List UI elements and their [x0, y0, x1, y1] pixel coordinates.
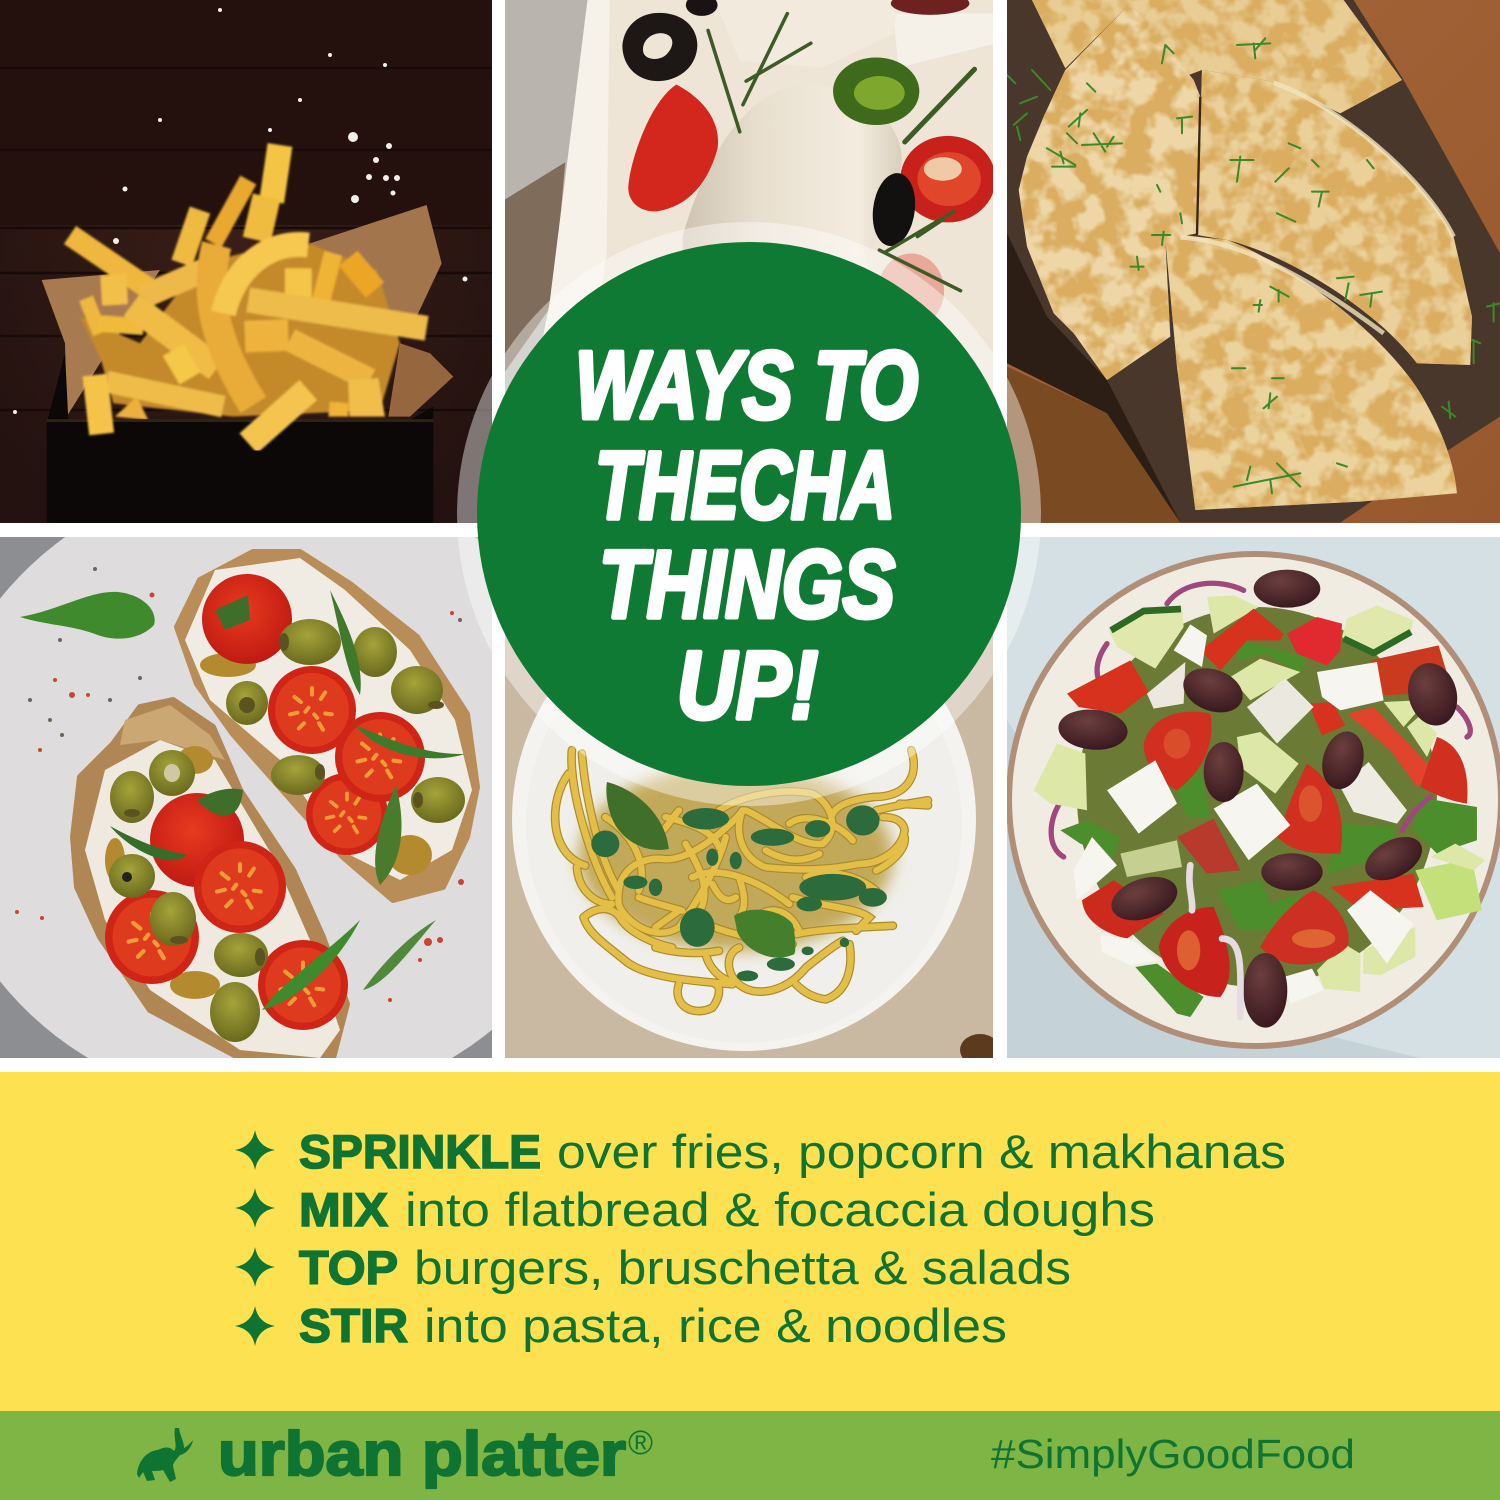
wooden board: [1007, 0, 1500, 523]
dill sprigs: [1007, 38, 1500, 493]
title text: [575, 332, 918, 739]
photo: Greek salad bowl: [1006, 537, 1500, 1058]
cucumber: [1109, 605, 1414, 669]
fries: [70, 145, 427, 420]
bullet: top: burgers, bruschetta & salads: [414, 1241, 1071, 1294]
black box: [47, 353, 433, 527]
black olive ring: [622, 13, 697, 81]
linguine strands: [555, 750, 928, 1011]
bullet: mix: MIX: [299, 1183, 388, 1236]
rosemary: [708, 14, 975, 291]
tomato pieces: [628, 84, 718, 211]
bullet: sprinkle: SPRINKLE: [299, 1125, 541, 1178]
spice specks: [15, 592, 464, 1002]
pasta mound: [579, 764, 893, 951]
mustard: [105, 653, 432, 999]
red pepper: [1067, 609, 1448, 910]
icon: elephant logo: [137, 1428, 193, 1482]
bullet: sprinkle: over fries, popcorn & makhanas: [557, 1125, 1286, 1178]
basil and rocket leaves: [20, 590, 465, 1010]
parchment paper: [42, 205, 453, 417]
onion: [1051, 583, 1470, 857]
olive slice: [872, 173, 916, 246]
translucent ring behind title circle: [457, 222, 1041, 806]
salad base: [1077, 607, 1437, 987]
bullet: sprinkle: [235, 1125, 1286, 1178]
photo: focaccia in white dish: [505, 0, 993, 394]
bullet: stir: [235, 1299, 1007, 1352]
photo: pesto linguine in white bowl: [505, 634, 993, 1058]
flatbread wedges: [1032, 0, 1402, 113]
title badge: [477, 242, 1021, 786]
title text: UP!: [677, 632, 818, 739]
kalamata olives: [1057, 570, 1464, 1028]
registered mark: ®: [628, 1424, 653, 1462]
salt flakes: [13, 8, 468, 414]
lettuce: [1060, 640, 1477, 1017]
photo: flatbread wedges on board: [1007, 0, 1500, 523]
bullet: stir: STIR: [299, 1299, 408, 1352]
dough ball: [682, 105, 902, 250]
pesto: [591, 805, 887, 981]
bullet: top: TOP: [299, 1241, 398, 1294]
feta cubes: [1074, 624, 1414, 1004]
olives: [109, 619, 465, 1042]
footer band: [0, 1411, 1500, 1500]
bread slices: [177, 552, 477, 900]
bullet: stir: into pasta, rice & noodles: [424, 1299, 1007, 1352]
basil leaves: [606, 782, 669, 850]
tomatoes: [1082, 712, 1467, 997]
title text: THECHA: [595, 432, 895, 539]
bullet: mix: into flatbread & focaccia doughs: [405, 1183, 1155, 1236]
title text: WAYS TO: [575, 332, 918, 439]
title text: THINGS: [599, 531, 895, 638]
tomatoes: [202, 574, 292, 664]
photo: french fries in a black box: [0, 0, 492, 527]
photo: bruschetta on plate: [0, 537, 492, 1058]
panel: yellow usage list: [0, 1072, 1500, 1411]
brand name: urban platter: [218, 1420, 626, 1489]
hashtag: #SimplyGoodFood: [991, 1431, 1355, 1477]
green pepper: [833, 57, 919, 125]
